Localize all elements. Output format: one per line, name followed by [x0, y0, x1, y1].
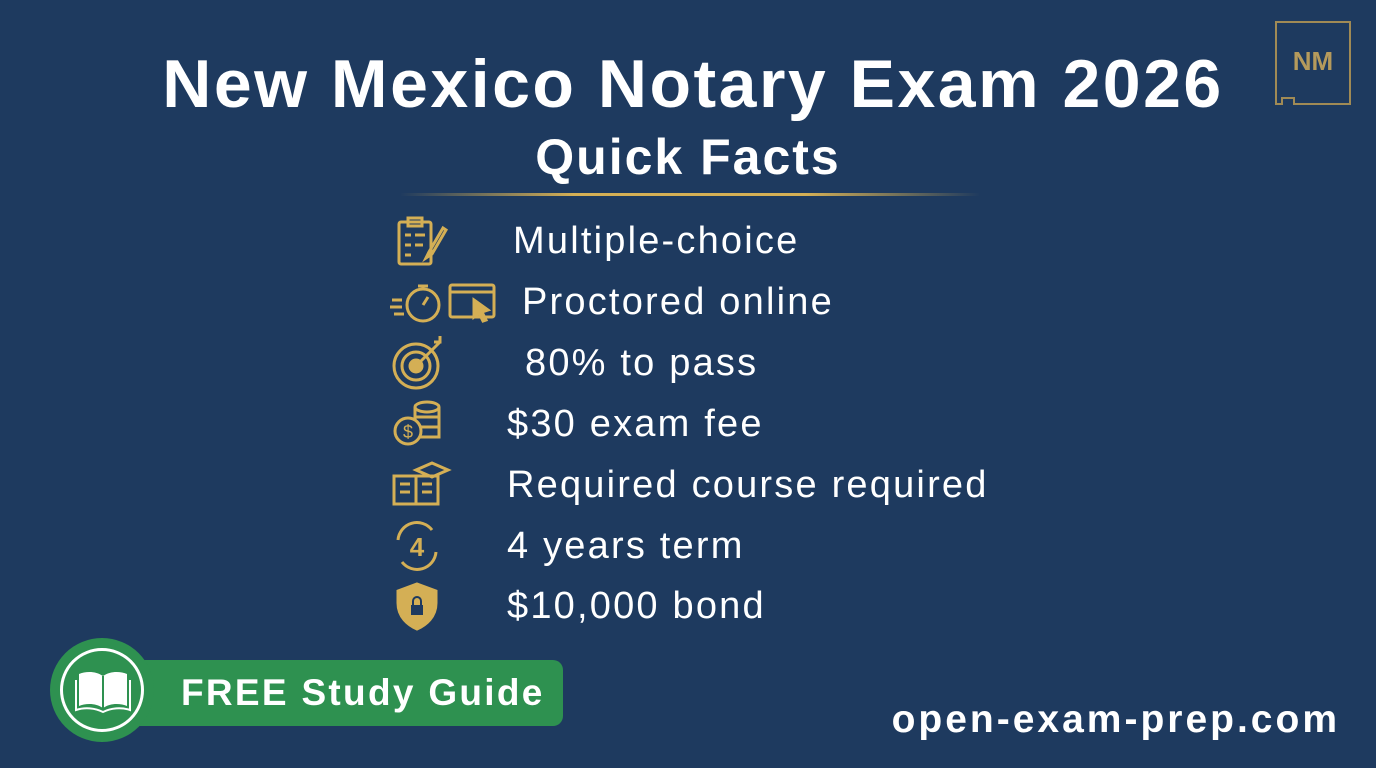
fact: delivery: Proctored online: [522, 281, 834, 323]
icon: NM state: [1275, 21, 1351, 105]
icon: cycle 4: 4: [410, 532, 425, 562]
icon: book with cap: [394, 463, 448, 504]
fact: course: Required course required: [507, 464, 989, 506]
icon: clipboard: [399, 218, 446, 264]
fact: term: 4 years term: [507, 525, 745, 567]
CTA: free study guide: FREE Study Guide: [181, 672, 545, 713]
fact: passing score: 80% to pass: [525, 342, 758, 384]
fact: fee: $30 exam fee: [507, 403, 764, 445]
fact: bond: $10,000 bond: [507, 585, 766, 627]
icon: NM state: NM: [1293, 46, 1333, 76]
CTA: free study guide: [50, 638, 563, 742]
subtitle: Quick Facts: [535, 129, 841, 185]
icon: open book: [75, 672, 131, 714]
icon: stopwatch and screen: [390, 285, 494, 321]
fact: format: Multiple-choice: [513, 220, 799, 262]
icon: target: [394, 336, 440, 388]
title: New Mexico Notary Exam 2026: [162, 46, 1224, 122]
icon: coins: $: [403, 422, 413, 442]
icon: shield lock: [398, 584, 436, 629]
website url: open-exam-prep.com: [892, 698, 1340, 741]
icon: cycle 4: [398, 523, 436, 569]
icon: coins: [395, 402, 439, 444]
fact list: [507, 220, 989, 627]
icon column: [390, 216, 496, 631]
